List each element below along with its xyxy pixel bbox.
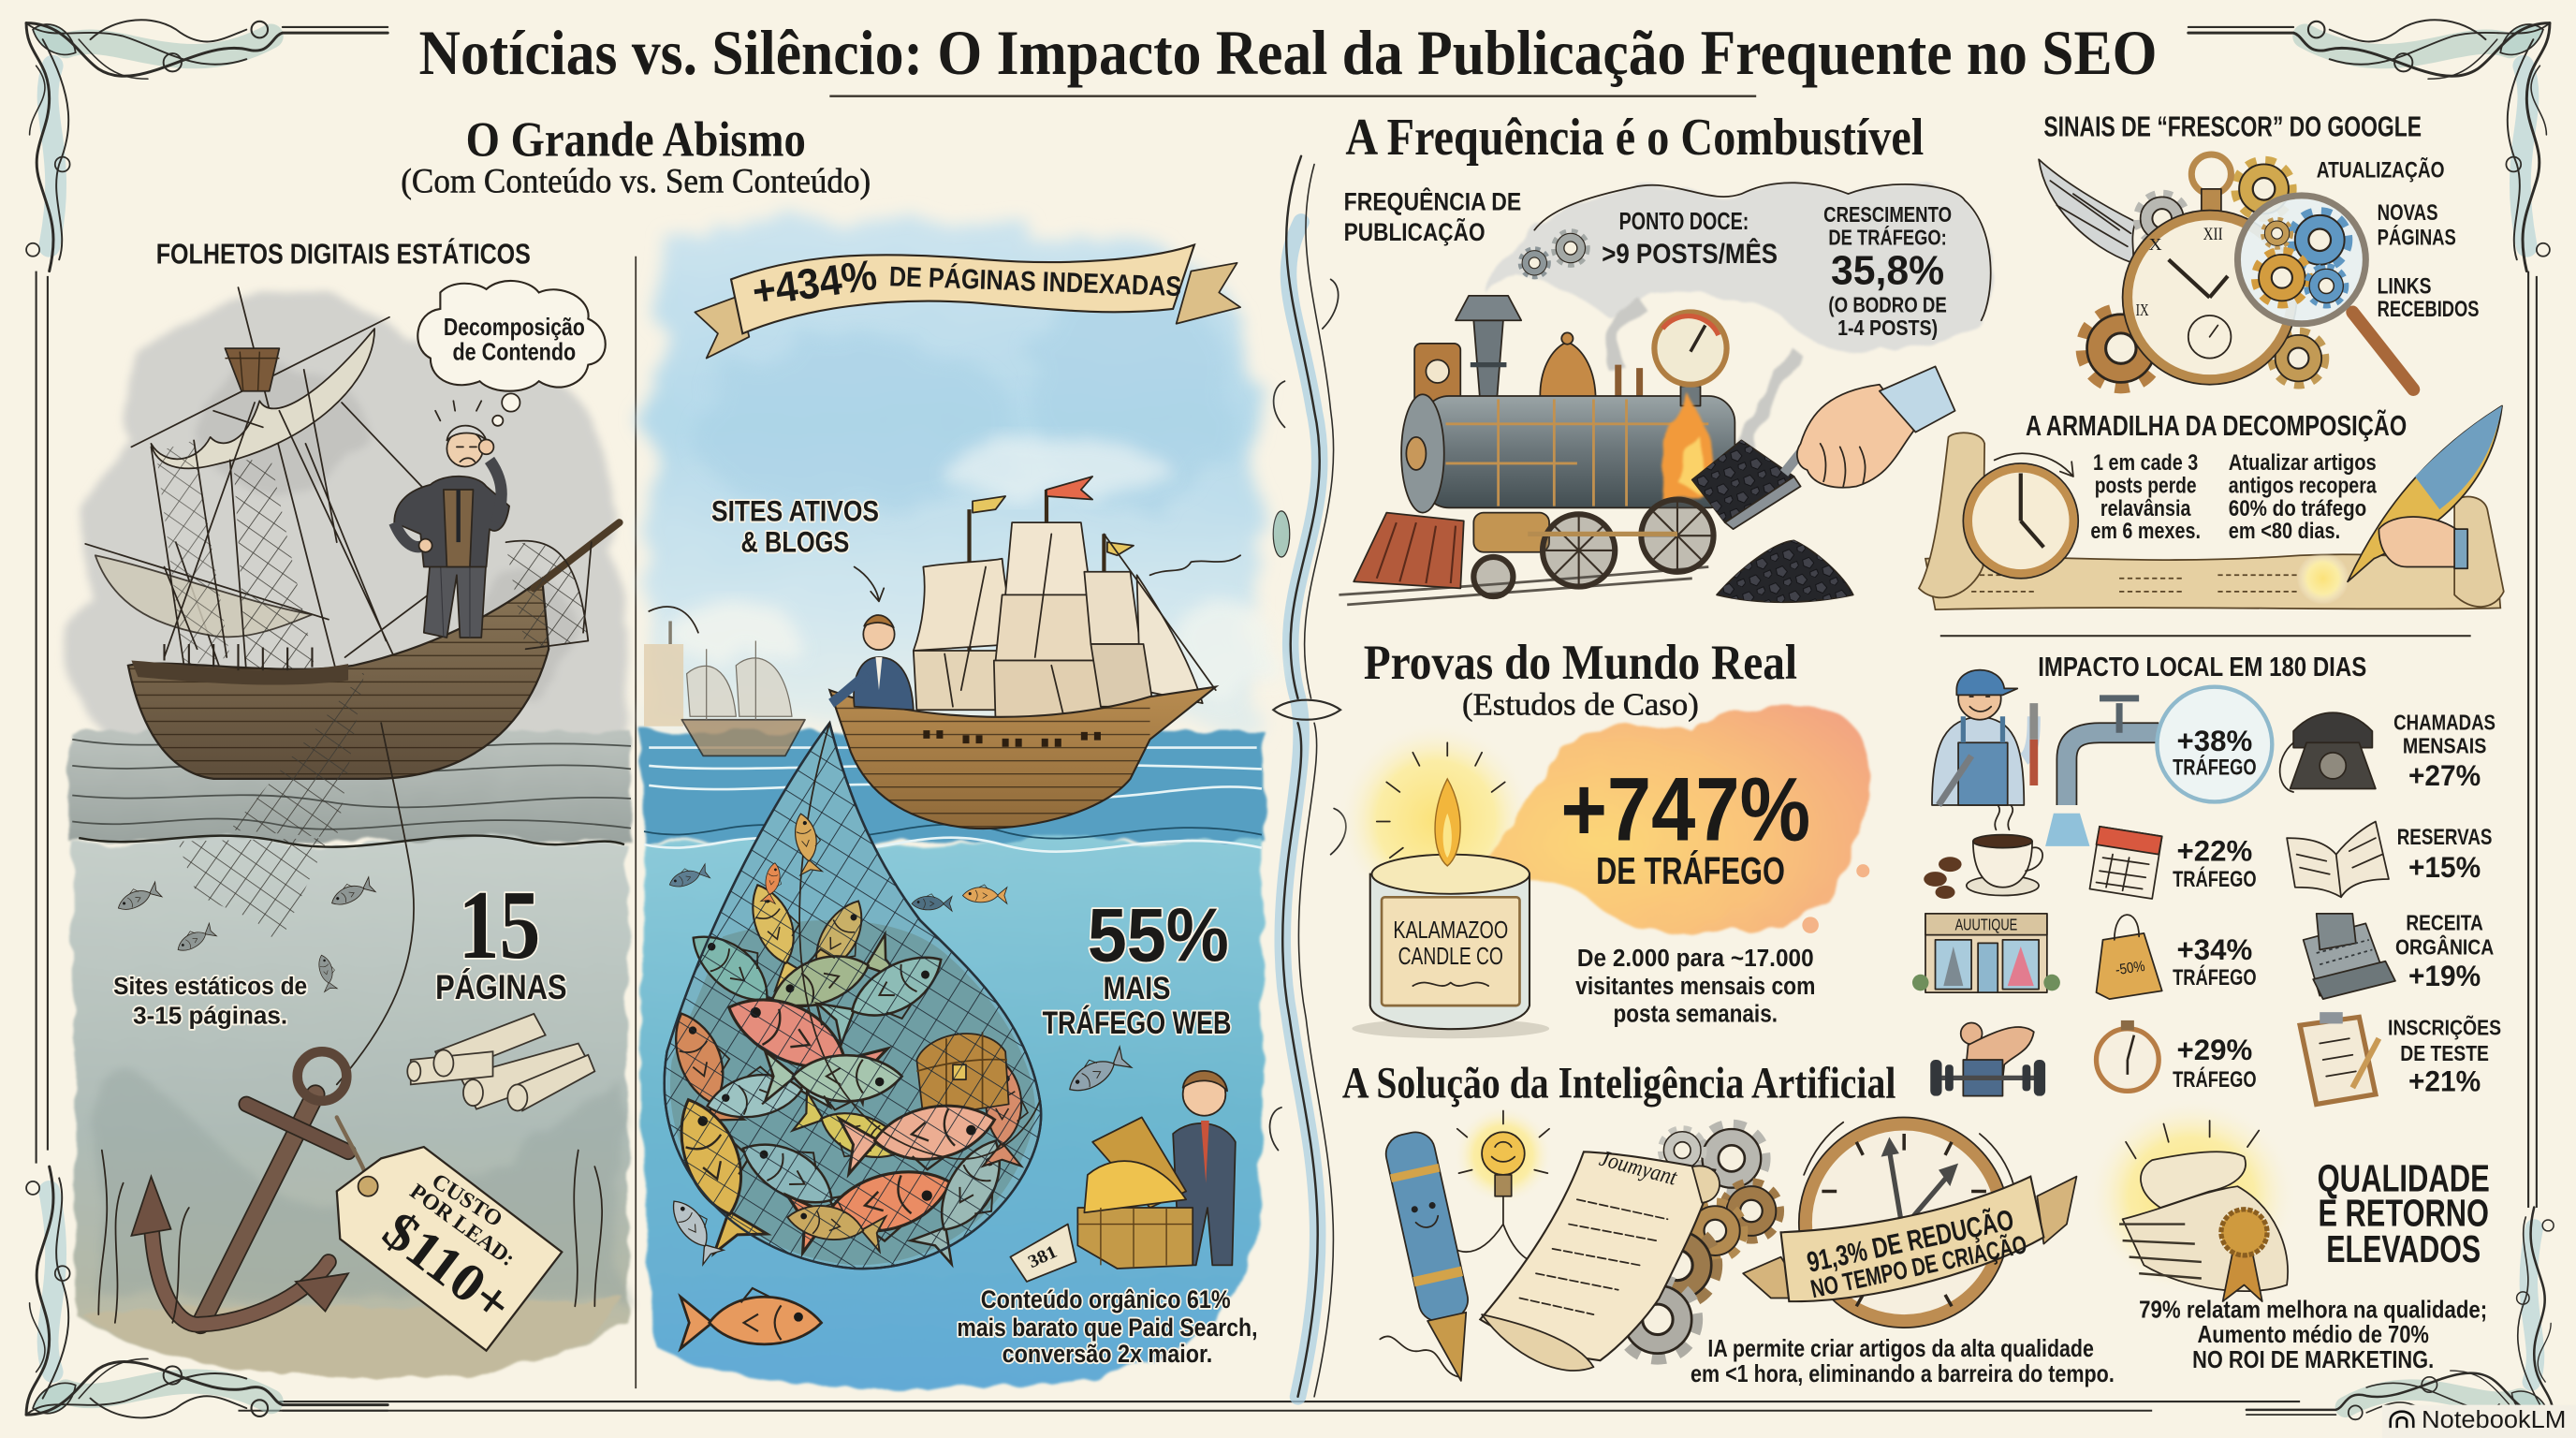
panel: local impact in 180 days	[1912, 653, 2501, 1104]
metric: trial signups: INSCRIÇÕES	[2388, 1016, 2501, 1040]
metric: +22% traffic: +22%	[2177, 834, 2252, 868]
illustration: document and gears	[1480, 1127, 1778, 1371]
text: decay fact: em 6 mexes.	[2090, 520, 2201, 544]
icon: open book	[2287, 822, 2389, 897]
labels: freshness signals	[2317, 157, 2479, 322]
blue sea	[642, 731, 1265, 1388]
smoke cloud with metrics: >9 POSTS/MÊS	[1602, 238, 1778, 270]
metric: +34% traffic: +34%	[2177, 932, 2252, 966]
text: static sites range: Sites estáticos de	[113, 972, 307, 1000]
price tag: cost per lead	[337, 1147, 562, 1351]
labels: freshness signals: RECEBIDOS	[2378, 298, 2479, 322]
businessman with treasure chest: 381	[1025, 1242, 1061, 1272]
blue watercolor sky	[648, 218, 1273, 731]
smoke cloud with metrics: PONTO DOCE:	[1619, 209, 1749, 235]
text: organic content	[957, 1284, 1258, 1368]
section heading: frequency is the fuel: A Frequência é o Combustível	[1345, 109, 1924, 167]
metric: +29% traffic	[2173, 1033, 2257, 1093]
label: publishing frequency	[1344, 187, 1521, 246]
text: AI enables fast articles	[1690, 1336, 2115, 1387]
labels: freshness signals: LINKS	[2378, 274, 2432, 299]
text: quality stats: 79% relatam melhora na qualidade;	[2139, 1298, 2487, 1324]
central ornamental divider	[1270, 156, 1346, 1397]
metric: +22% traffic: TRÁFEGO	[2173, 866, 2257, 892]
icon: weightlifter	[1930, 1023, 2045, 1096]
text: organic content: mais barato que Paid Search,	[957, 1313, 1258, 1342]
section heading: real world proof: (Estudos de Caso)	[1462, 687, 1699, 722]
text: decay fact: relavânsia	[2100, 497, 2191, 521]
metric: +34% traffic	[2173, 932, 2257, 990]
text: static sites range	[113, 972, 307, 1029]
metric: organic revenue: +19%	[2408, 959, 2481, 992]
text: update recovery fact: 60% do tráfego	[2229, 497, 2366, 521]
wrecked ship	[85, 287, 620, 779]
section heading: real world proof: Provas do Mundo Real	[1364, 636, 1797, 690]
text: candle company result: visitantes mensais com	[1575, 972, 1815, 1000]
sailor hauling the net	[831, 615, 914, 710]
illustration: winged clock and magnifier	[2039, 154, 2413, 389]
text: AI enables fast articles: IA permite criar artigos da alta qualidade	[1707, 1336, 2094, 1362]
icon: clipboard	[2300, 1012, 2378, 1104]
heading: static brochures: FOLHETOS DIGITAIS ESTÁTICOS	[156, 238, 531, 271]
panel divider line	[635, 257, 637, 1388]
icon: coal pile	[1717, 540, 1853, 602]
title: Notícias vs. Silêncio: O Impacto Real da Publicação Frequente no SEO	[419, 18, 2157, 88]
icon: Kalamazoo candle: CANDLE CO	[1398, 942, 1503, 970]
metric: monthly calls: CHAMADAS	[2393, 710, 2496, 734]
text: candle company result	[1575, 944, 1815, 1028]
illustration: winged clock and magnifier: IX	[2136, 301, 2149, 319]
text: candle company result: De 2.000 para ~17.000	[1577, 944, 1814, 972]
section heading: the AI solution: A Solução da Inteligência Artificial	[1342, 1059, 1895, 1108]
panel: static sites, sinking ship	[69, 238, 631, 1377]
banner: +434% indexed pages: +434%	[750, 251, 880, 315]
illustration: winged clock and magnifier: XII	[2203, 225, 2223, 244]
icon: bundled scrolls	[407, 1014, 594, 1110]
grey dead fish	[114, 874, 375, 991]
grey storm clouds	[69, 294, 624, 748]
net full of fish	[661, 723, 1041, 1269]
banner: +434% indexed pages	[695, 245, 1240, 359]
icon: coffee cup	[1924, 805, 2042, 899]
icon: Kalamazoo candle: KALAMAZOO	[1393, 916, 1508, 944]
label: publishing frequency: PUBLICAÇÃO	[1344, 217, 1486, 246]
text: AI enables fast articles: em <1 hora, eliminando a barreira do tempo.	[1690, 1361, 2115, 1387]
panel: active sites, full net	[642, 218, 1273, 1388]
label: publishing frequency: FREQUÊNCIA DE	[1344, 187, 1521, 216]
text: quality stats: Aumento médio de 70%	[2197, 1322, 2429, 1348]
metric: +22% traffic	[2173, 834, 2257, 892]
illustration: document and gears: Joumyant	[1597, 1146, 1680, 1191]
section heading: real world proof	[1364, 636, 1797, 722]
metric: monthly calls	[2393, 710, 2496, 792]
text: decay fact: 1 em cade 3	[2093, 451, 2198, 476]
icon: cash register	[2304, 914, 2395, 999]
bubble: +38% traffic: TRÁFEGO	[2173, 755, 2257, 781]
seaweed	[98, 1151, 602, 1323]
banner: +434% indexed pages: DE PÁGINAS INDEXADAS	[888, 260, 1182, 302]
heading: decay trap: A ARMADILHA DA DECOMPOSIÇÃO	[2026, 409, 2407, 442]
metric: bookings: RESERVAS	[2397, 826, 2492, 850]
metric: organic revenue: RECEITA	[2406, 910, 2483, 934]
labels: freshness signals: PÁGINAS	[2378, 225, 2456, 251]
text: update recovery fact	[2229, 451, 2377, 544]
illustration: parchment scroll with clock and quill	[1919, 406, 2504, 609]
big number: 15 pages: PÁGINAS	[435, 968, 567, 1006]
grey sea and seabed	[69, 731, 631, 1377]
label: active sites and blogs: & BLOGS	[741, 525, 849, 559]
metric: monthly calls: MENSAIS	[2403, 734, 2486, 758]
thought bubble: de Contendo	[453, 339, 576, 365]
torn net and rope	[178, 670, 414, 1084]
smoke cloud with metrics: DE TRÁFEGO:	[1828, 226, 1947, 250]
icon: Kalamazoo candle	[1352, 779, 1549, 1038]
banner: 91.3% time reduction: 91,3% DE REDUÇÃO	[1804, 1203, 2016, 1279]
illustration: steam locomotive	[1339, 296, 1734, 605]
traffic burst blob: +747%	[1560, 760, 1810, 860]
icon: water tap	[2045, 698, 2159, 846]
thought bubble	[417, 281, 606, 426]
big number: 55% more traffic	[1043, 894, 1231, 1041]
illustration: AI pen and bulb	[1380, 1106, 1618, 1387]
labels: freshness signals: ATUALIZAÇÃO	[2317, 157, 2445, 183]
metric: organic revenue: ORGÂNICA	[2395, 935, 2494, 960]
icon: rusty anchor	[131, 1051, 370, 1325]
big number: 15 pages: 15	[459, 870, 540, 979]
price tag: cost per lead: POR LEAD:	[405, 1180, 520, 1271]
icon: plumber	[1932, 670, 2034, 805]
metric: monthly calls: +27%	[2408, 758, 2481, 792]
text: candle company result: posta semanais.	[1614, 1000, 1778, 1028]
NotebookLM watermark: NotebookLM	[2422, 1405, 2566, 1433]
text: update recovery fact: em <80 dias.	[2229, 520, 2340, 544]
metric: +29% traffic: TRÁFEGO	[2173, 1066, 2257, 1093]
section heading: O Grande Abismo	[401, 113, 871, 199]
heading: IMPACTO LOCAL EM 180 DIAS	[2038, 653, 2366, 682]
swimming fish	[664, 861, 1132, 1349]
text: decay fact	[2090, 451, 2201, 544]
metric: trial signups: +21%	[2408, 1064, 2481, 1097]
icon: boutique storefront	[1912, 914, 2060, 992]
illustration: hand shoveling coal	[1692, 366, 1955, 529]
label: high quality and return: QUALIDADE	[2318, 1156, 2490, 1199]
illustration: big clock	[1799, 1117, 2014, 1328]
metric: bookings: +15%	[2408, 850, 2481, 884]
text: quality stats	[2139, 1298, 2487, 1373]
traffic burst blob	[1338, 704, 1869, 933]
metric: organic revenue	[2395, 910, 2494, 992]
heading: Google freshness signals: SINAIS DE “FRESCOR” DO GOOGLE	[2043, 110, 2422, 143]
icon: boutique storefront: AUUTIQUE	[1955, 915, 2017, 933]
text: update recovery fact: antigos recopera	[2229, 475, 2377, 499]
smoke cloud with metrics: 35,8%	[1831, 248, 1944, 294]
worried man on deck	[394, 401, 509, 638]
price tag: cost per lead: CUSTO	[427, 1169, 506, 1232]
bubble: +38% traffic	[2157, 687, 2272, 801]
text: organic content: Conteúdo orgânico 61%	[981, 1284, 1231, 1313]
text: static sites range: 3-15 páginas.	[133, 1001, 287, 1029]
big number: 15 pages	[435, 870, 567, 1006]
section heading: O Grande Abismo: O Grande Abismo	[466, 113, 806, 168]
NotebookLM watermark	[2382, 1405, 2576, 1438]
banner: 91.3% time reduction	[1743, 1177, 2076, 1303]
metric: trial signups	[2388, 1016, 2501, 1097]
arrow to sailor	[855, 567, 884, 601]
metric: +29% traffic: +29%	[2177, 1033, 2252, 1066]
label: active sites and blogs	[711, 493, 879, 559]
label: high quality and return: ELEVADOS	[2326, 1227, 2481, 1270]
smoke cloud with metrics: CRESCIMENTO	[1823, 202, 1952, 227]
text: organic content: conversão 2x maior.	[1003, 1339, 1212, 1368]
icon: telephone	[2280, 712, 2376, 792]
label: active sites and blogs: SITES ATIVOS	[711, 493, 879, 527]
label: high quality and return	[2318, 1156, 2490, 1270]
healthy galleon	[829, 477, 1216, 829]
bubble: +38% traffic: +38%	[2177, 724, 2252, 757]
metric: trial signups: DE TESTE	[2400, 1041, 2489, 1065]
smoke cloud with metrics	[1488, 183, 1991, 477]
icon: shopping bag	[2097, 915, 2162, 999]
text: quality stats: NO ROI DE MARKETING.	[2192, 1347, 2434, 1373]
metric: +34% traffic: TRÁFEGO	[2173, 964, 2257, 990]
thought bubble: Decomposição	[444, 315, 585, 341]
banner: 91.3% time reduction: NO TEMPO DE CRIAÇÃO	[1808, 1229, 2029, 1303]
icon: stopwatch	[2097, 1020, 2159, 1091]
illustration: quality scroll with seal	[2086, 1097, 2297, 1301]
metric: bookings	[2397, 826, 2492, 884]
big number: 55% more traffic: 55%	[1088, 894, 1229, 978]
smoke cloud with metrics: (O BODRO DE	[1828, 292, 1947, 316]
price tag: cost per lead: $110+	[372, 1199, 524, 1335]
label: high quality and return: E RETORNO	[2318, 1191, 2489, 1234]
text: update recovery fact: Atualizar artigos	[2229, 451, 2377, 476]
section heading: O Grande Abismo: (Com Conteúdo vs. Sem Conteúdo)	[401, 161, 871, 199]
smoke cloud with metrics: 1-4 POSTS)	[1837, 315, 1938, 340]
labels: freshness signals: NOVAS	[2378, 201, 2438, 226]
icon: calendar	[2089, 827, 2162, 899]
illustration: winged clock and magnifier: X	[2149, 235, 2162, 254]
traffic burst blob: DE TRÁFEGO	[1596, 849, 1785, 892]
big number: 55% more traffic: TRÁFEGO WEB	[1043, 1004, 1231, 1041]
big number: 55% more traffic: MAIS	[1104, 971, 1171, 1006]
distant harbour ships	[644, 621, 805, 756]
businessman with treasure chest	[1010, 1071, 1236, 1282]
text: decay fact: posts perde	[2095, 475, 2197, 499]
icon: shopping bag: -50%	[2115, 959, 2146, 978]
